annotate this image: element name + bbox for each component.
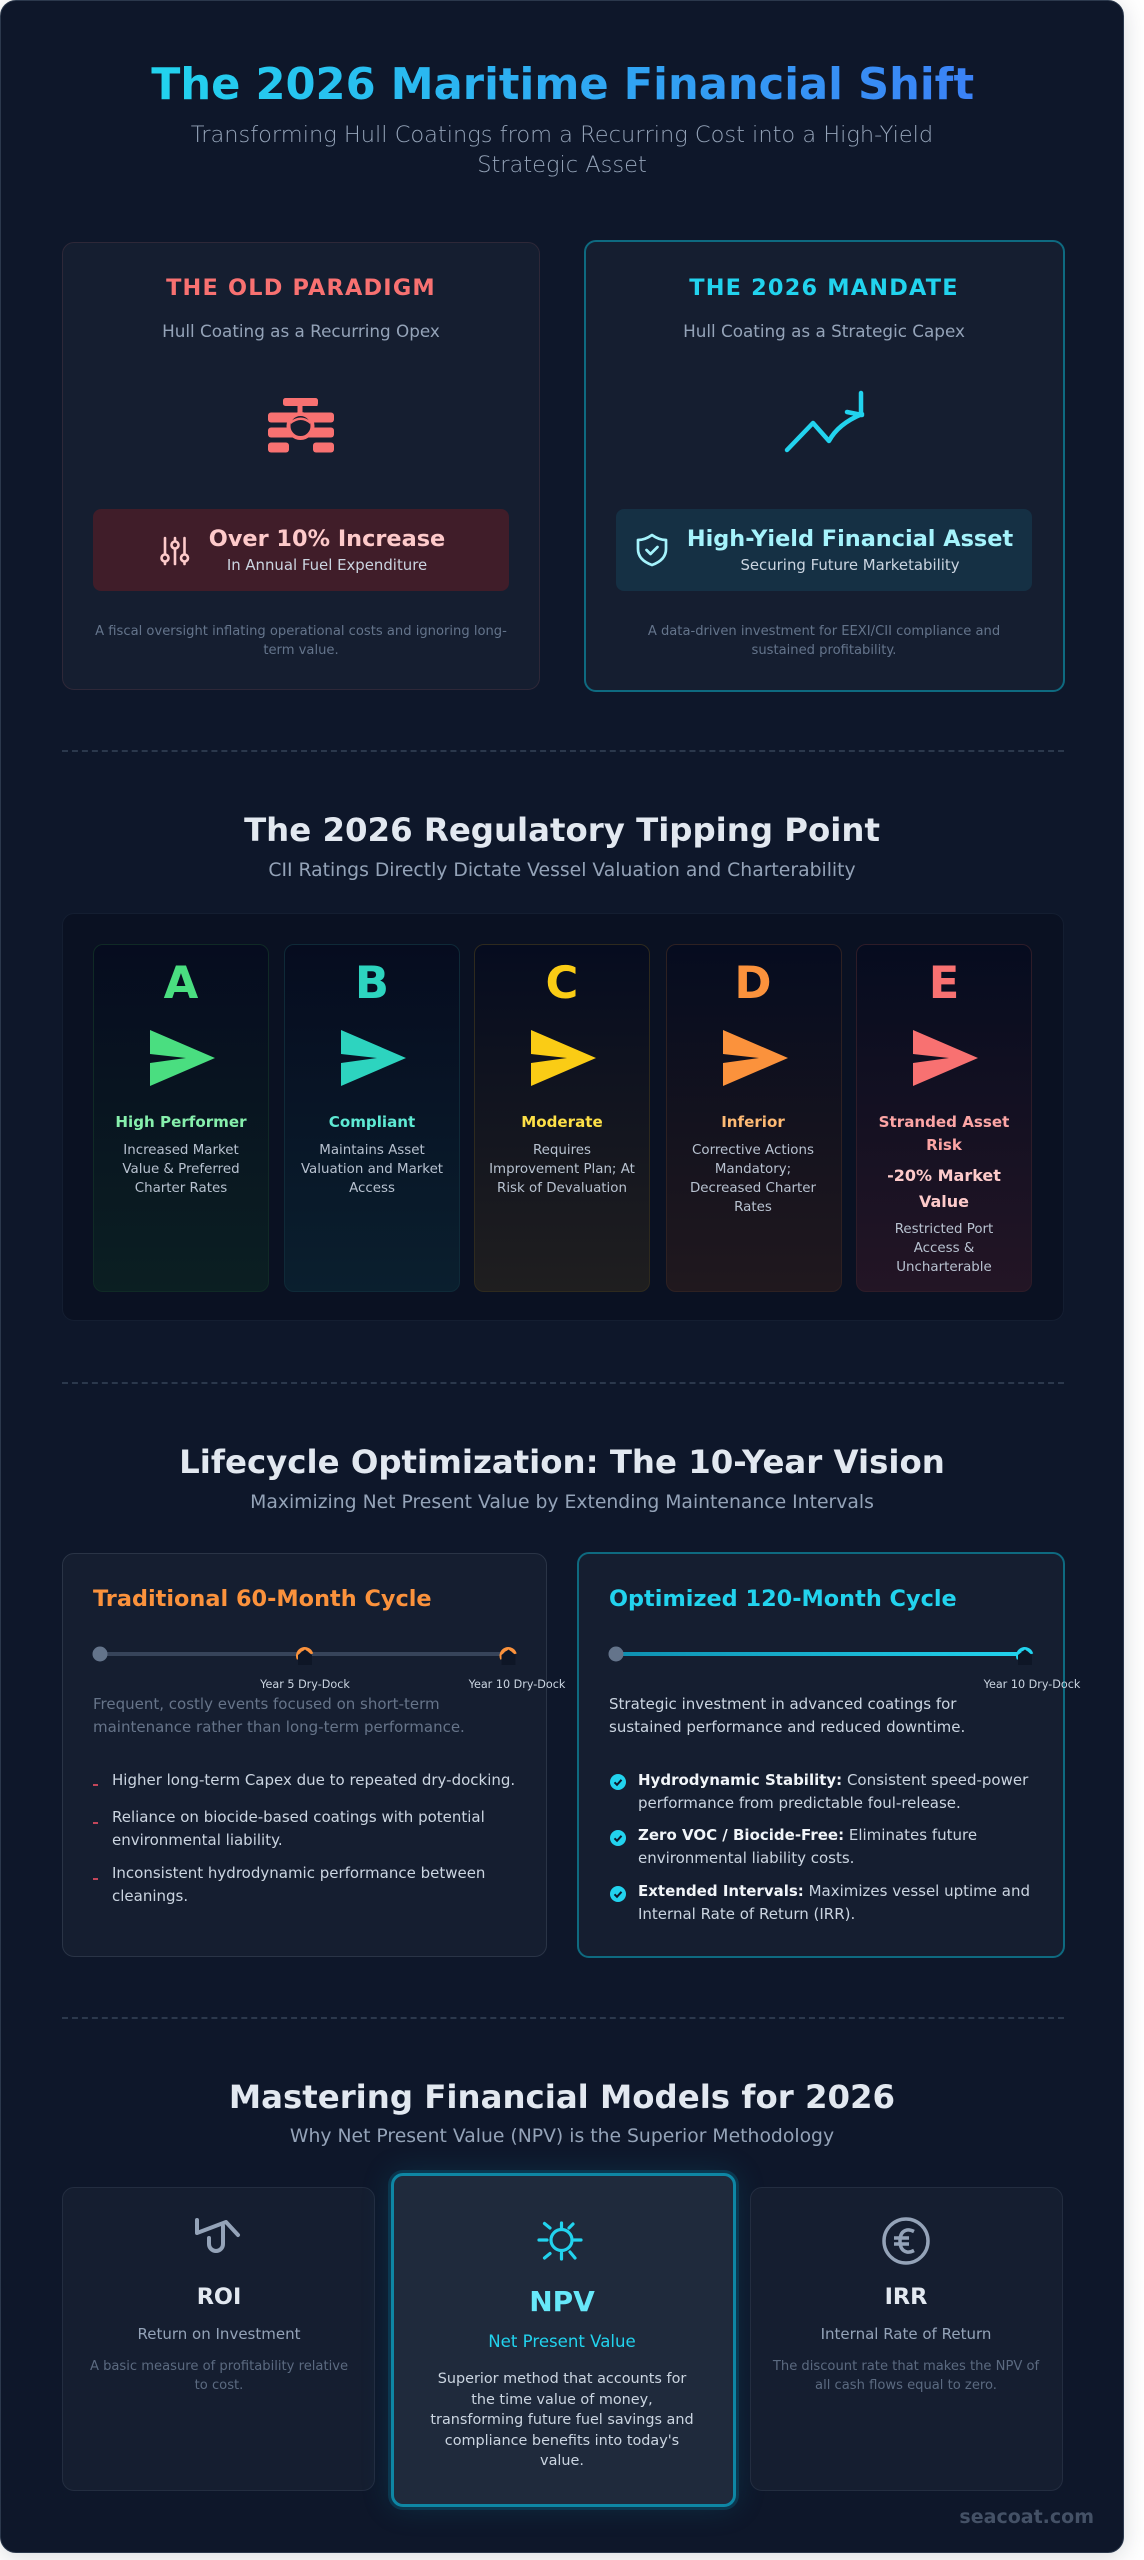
- card: grade B: [284, 944, 460, 1292]
- grade description D: Corrective Actions: [692, 1143, 814, 1158]
- card: grade C: [474, 944, 650, 1292]
- list item: Zero VOC / Biocide-Free: Eliminates future: [638, 1826, 977, 1844]
- grade description E: Uncharterable: [896, 1260, 992, 1275]
- subtitle: [191, 122, 933, 178]
- panel: old paradigm: [62, 242, 540, 690]
- list item: environmental liability.: [112, 1831, 283, 1849]
- grade letter D: D: [734, 956, 772, 1009]
- grade description C: Improvement Plan; At: [489, 1162, 635, 1177]
- NPV description: the time value of money,: [471, 2392, 653, 2408]
- market value callout: [887, 1166, 1001, 1211]
- callout: fuel increase: [93, 509, 509, 591]
- mandate heading: THE 2026 MANDATE: [689, 275, 959, 301]
- grade description E: Access &: [914, 1241, 974, 1256]
- icon: arrow B: [341, 1030, 406, 1086]
- callout value: High-Yield Financial Asset: [687, 526, 1013, 552]
- panel: optimized cycle: [577, 1552, 1065, 1958]
- optimized description: [609, 1695, 965, 1736]
- card: grade E: [856, 944, 1032, 1292]
- heading: lifecycle optimization: Lifecycle Optimization: The 10-Year Vision: [179, 1443, 945, 1481]
- IRR description: all cash flows equal to zero.: [815, 2378, 997, 2393]
- optimized list: [610, 1771, 1030, 1923]
- callout: financial asset: [616, 509, 1032, 591]
- grade description D: Decreased Charter: [690, 1181, 816, 1196]
- grade description E: [895, 1222, 993, 1275]
- timeline label year 10: Year 10 Dry-Dock: [984, 1678, 1080, 1691]
- grade letter E: E: [929, 956, 959, 1009]
- mandate description: A data-driven investment for EEXI/CII compliance and: [648, 624, 1000, 639]
- list item: [638, 1826, 977, 1867]
- IRR title: IRR: [885, 2284, 927, 2310]
- optimized timeline: [608, 1646, 1034, 1665]
- card: grade A: [93, 944, 269, 1292]
- heading: regulatory tipping point: The 2026 Regulatory Tipping Point: [244, 811, 880, 849]
- icon: check: [610, 1774, 626, 1790]
- list item: Higher long-term Capex due to repeated dry-docking.: [112, 1771, 515, 1789]
- subheading: regulatory: CII Ratings Directly Dictate Vessel Valuation and Charterability: [268, 860, 856, 881]
- grade description A: Charter Rates: [135, 1181, 227, 1196]
- list item: Hydrodynamic Stability: Consistent speed-power: [638, 1771, 1028, 1789]
- dash bullet: [93, 1878, 98, 1880]
- old paradigm description: term value.: [263, 643, 339, 658]
- panel: traditional cycle: [62, 1553, 547, 1957]
- grade description A: Value & Preferred: [122, 1162, 240, 1177]
- icon: ROI arrow: [195, 2218, 240, 2253]
- dash bullet: [93, 1822, 98, 1824]
- icon: rising chart: [784, 390, 864, 452]
- panel: IRR: [750, 2187, 1063, 2491]
- ROI description: A basic measure of profitability relative: [90, 2359, 348, 2374]
- list item: [112, 1808, 485, 1849]
- ROI description: to cost.: [195, 2378, 243, 2393]
- grade description A: [122, 1143, 240, 1196]
- subheading: financial models: Why Net Present Value (NPV) is the Superior Methodology: [290, 2126, 834, 2147]
- old paradigm description: A fiscal oversight inflating operational costs and ignoring long-: [95, 624, 507, 639]
- subtitle: Strategic Asset: [477, 152, 647, 178]
- icon: check: [610, 1830, 626, 1846]
- NPV description: value.: [540, 2453, 584, 2469]
- grade description B: Access: [349, 1181, 395, 1196]
- old paradigm subheading: Hull Coating as a Recurring Opex: [162, 321, 440, 341]
- traditional description: [93, 1695, 465, 1736]
- grade description C: [489, 1143, 635, 1196]
- optimized description: sustained performance and reduced downtime.: [609, 1718, 965, 1736]
- icon: arrow C: [531, 1030, 596, 1086]
- heading: financial models: Mastering Financial Models for 2026: [229, 2078, 895, 2116]
- grade description D: Mandatory;: [715, 1162, 791, 1177]
- grade description A: Increased Market: [123, 1143, 239, 1158]
- dash bullet: [93, 1784, 98, 1786]
- callout value: Over 10% Increase: [209, 526, 445, 552]
- grade name E: [879, 1113, 1009, 1154]
- traditional list: [93, 1771, 515, 1905]
- NPV description: compliance benefits into today's: [445, 2433, 679, 2449]
- grade name D: Inferior: [721, 1113, 785, 1131]
- IRR description: [772, 2359, 1040, 2393]
- list item: cleanings.: [112, 1887, 188, 1905]
- panel: NPV: [391, 2173, 736, 2507]
- list item: Inconsistent hydrodynamic performance between: [112, 1864, 485, 1882]
- list item: Internal Rate of Return (IRR).: [638, 1905, 855, 1923]
- market value callout: Value: [919, 1192, 969, 1211]
- list item: [638, 1771, 1028, 1812]
- grade name A: High Performer: [115, 1113, 247, 1131]
- callout caption: Securing Future Marketability: [740, 556, 960, 574]
- grade letter C: C: [546, 956, 578, 1009]
- traditional description: Frequent, costly events focused on short-term: [93, 1695, 440, 1713]
- icon: check: [610, 1886, 626, 1902]
- icon: arrow A: [150, 1030, 215, 1086]
- subtitle: Transforming Hull Coatings from a Recurring Cost into a High-Yield: [191, 122, 933, 148]
- title: The 2026 Maritime Financial Shift: [151, 60, 974, 110]
- mandate description: [648, 624, 1000, 658]
- traditional timeline: [92, 1646, 517, 1665]
- traditional heading: Traditional 60-Month Cycle: [93, 1586, 432, 1612]
- icon: sliders: [160, 536, 190, 566]
- NPV subtitle: Net Present Value: [488, 2332, 636, 2351]
- traditional description: maintenance rather than long-term performance.: [93, 1718, 465, 1736]
- icon: arrow E: [913, 1030, 978, 1086]
- grade letter A: A: [164, 956, 198, 1009]
- old paradigm heading: THE OLD PARADIGM: [166, 275, 436, 301]
- list item: Extended Intervals: Maximizes vessel uptime and: [638, 1882, 1030, 1900]
- IRR subtitle: Internal Rate of Return: [821, 2325, 991, 2343]
- grade description D: [690, 1143, 816, 1215]
- icon: shield check: [636, 534, 668, 566]
- timeline label year 10: Year 10 Dry-Dock: [469, 1678, 565, 1691]
- grade description D: Rates: [734, 1200, 772, 1215]
- ROI title: ROI: [197, 2284, 241, 2310]
- callout caption: In Annual Fuel Expenditure: [227, 556, 427, 574]
- grade name B: Compliant: [329, 1113, 415, 1131]
- icon: coin and bricks: [268, 398, 334, 452]
- list item: [638, 1882, 1030, 1923]
- panel: CII ratings: [62, 913, 1064, 1321]
- icon: IRR euro: [882, 2217, 930, 2265]
- optimized heading: Optimized 120-Month Cycle: [609, 1586, 957, 1612]
- timeline label year 5: Year 5 Dry-Dock: [260, 1678, 350, 1691]
- panel: 2026 mandate: [584, 240, 1065, 692]
- list item: environmental liability costs.: [638, 1849, 854, 1867]
- grade letter B: B: [355, 956, 389, 1009]
- brand footer: seacoat.com: [959, 2506, 1094, 2528]
- grade description B: Valuation and Market: [301, 1162, 443, 1177]
- IRR description: The discount rate that makes the NPV of: [773, 2359, 1039, 2374]
- list item: performance from predictable foul-release.: [638, 1794, 961, 1812]
- grade name C: Moderate: [521, 1113, 603, 1131]
- NPV description: Superior method that accounts for: [438, 2371, 686, 2387]
- ROI subtitle: Return on Investment: [138, 2325, 300, 2343]
- grade description B: Maintains Asset: [319, 1143, 425, 1158]
- NPV title: NPV: [529, 2285, 595, 2318]
- grade description E: Restricted Port: [895, 1222, 993, 1237]
- grade name E: Risk: [926, 1136, 962, 1154]
- grade description C: Requires: [533, 1143, 591, 1158]
- grade name E: Stranded Asset: [879, 1113, 1009, 1131]
- NPV description: [430, 2371, 694, 2469]
- list item: [112, 1864, 485, 1905]
- grade description B: [301, 1143, 443, 1196]
- old paradigm description: [95, 624, 507, 658]
- icon: NPV sun: [537, 2221, 583, 2261]
- ROI description: [90, 2359, 348, 2393]
- list item: Reliance on biocide-based coatings with potential: [112, 1808, 485, 1826]
- icon: arrow D: [723, 1030, 788, 1086]
- card: grade D: [666, 944, 842, 1292]
- market value callout: -20% Market: [887, 1166, 1001, 1185]
- subheading: lifecycle: Maximizing Net Present Value by Extending Maintenance Intervals: [250, 1492, 874, 1513]
- NPV description: transforming future fuel savings and: [430, 2412, 694, 2428]
- grade description C: Risk of Devaluation: [497, 1181, 627, 1196]
- optimized description: Strategic investment in advanced coatings for: [609, 1695, 956, 1713]
- panel: ROI: [62, 2187, 375, 2491]
- mandate subheading: Hull Coating as a Strategic Capex: [683, 321, 965, 341]
- mandate description: sustained profitability.: [752, 643, 896, 658]
